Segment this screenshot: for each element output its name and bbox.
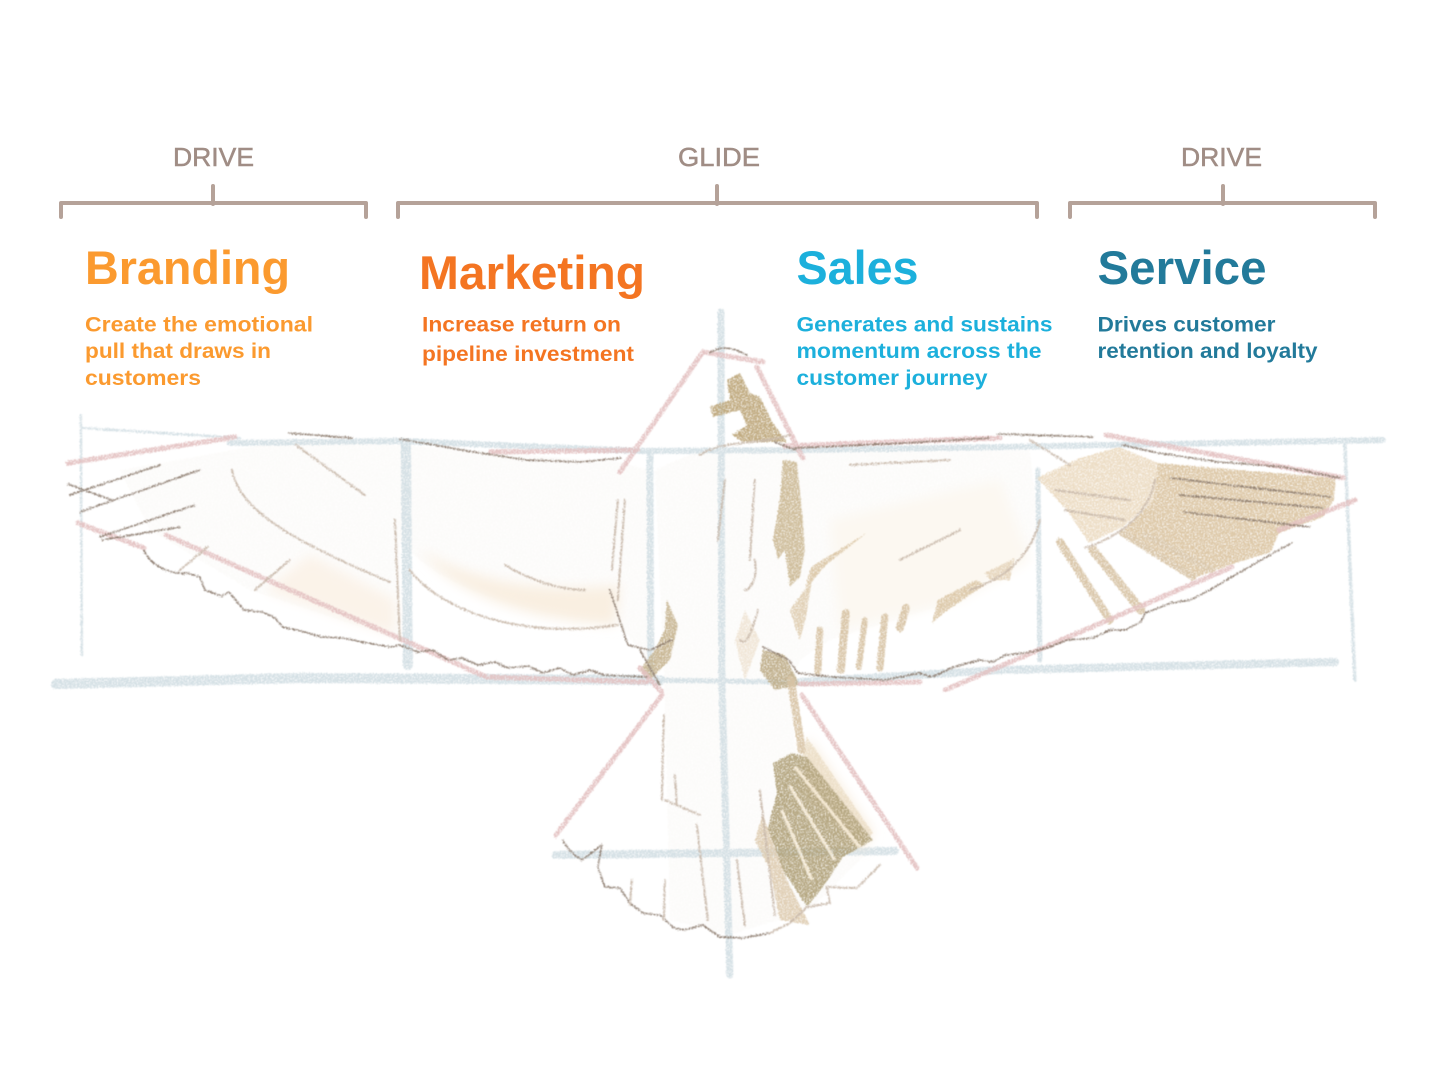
text: branding description [85,314,313,390]
text: marketing description: pipeline investment [422,343,634,366]
text: sales description [796,314,1052,390]
label: right drive: DRIVE [1181,142,1262,172]
label: glide: GLIDE [678,142,760,172]
tail tan feathers [755,680,873,925]
text: service description: Drives customer [1098,314,1276,336]
panel: service [1098,241,1318,363]
text: service description [1098,314,1318,363]
panel: sales [796,241,1052,390]
cream body and wing shading [265,480,1030,850]
text: marketing description [422,314,634,366]
wing and tail base shading [120,440,1040,935]
text: sales description: momentum across the [796,340,1042,363]
pink proportion guide lines [68,352,1355,868]
heading: service: Service [1098,241,1266,294]
heading: branding: Branding [85,241,290,294]
label: left drive: DRIVE [173,142,254,172]
text: branding description: pull that draws in [85,340,271,363]
right wing tan feathers [773,447,1336,672]
text: sales description: customer journey [796,367,988,390]
text: branding description: customers [85,367,201,390]
heading: sales: Sales [796,241,918,294]
sketched outlines and feather marks [68,348,1340,938]
panel: marketing [419,246,645,366]
panel: branding [85,241,313,390]
text: service description: retention and loyalty [1098,340,1318,363]
text: branding description: Create the emotional [85,314,313,336]
bird sketch illustration [56,312,1383,975]
heading: marketing: Marketing [419,246,645,299]
bracket: left drive [61,142,366,217]
bracket: glide [398,142,1037,217]
text: sales description: Generates and sustains [796,314,1052,336]
bracket: right drive [1070,142,1375,217]
construction grid lines [56,312,1383,975]
text: marketing description: Increase return on [422,314,621,336]
head and shoulder tan patches [640,373,800,690]
